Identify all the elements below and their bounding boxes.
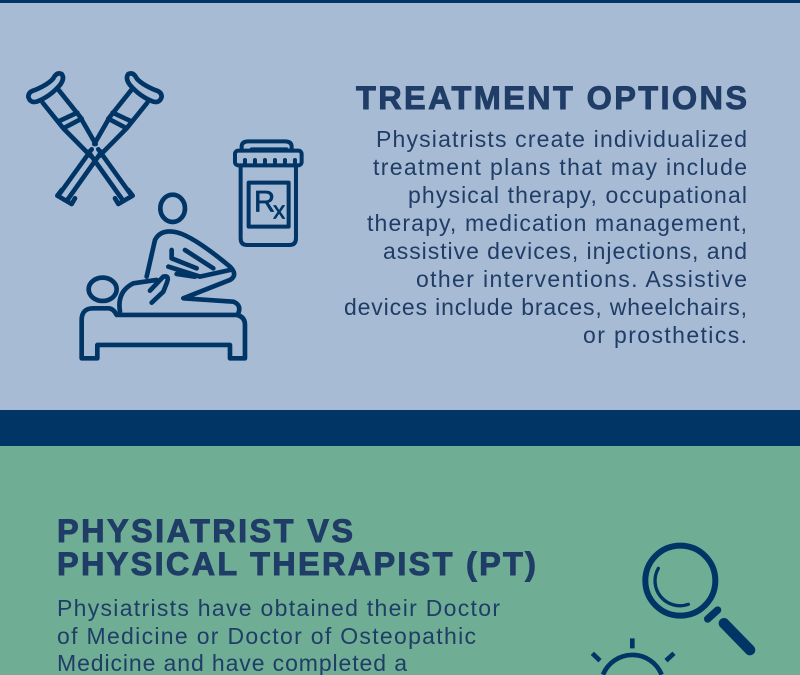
heading: treatment options: TREATMENT OPTIONS: [356, 80, 747, 116]
icon: prescription bottle: [235, 141, 302, 245]
text block: treatment description: physical therapy, occupational: [408, 182, 747, 208]
heading: physiatrist vs physical therapist: PHYSICAL THERAPIST (PT): [57, 546, 536, 582]
text block: physiatrist training: of Medicine or Doctor of Osteopathic: [57, 623, 476, 649]
text block: treatment description: or prosthetics.: [583, 322, 747, 348]
text block: treatment description: therapy, medication management,: [367, 210, 747, 236]
heading: physiatrist vs physical therapist: PHYSIATRIST VS: [57, 513, 353, 549]
heading: physiatrist vs physical therapist: [57, 513, 536, 582]
panel: treatment options background: [0, 3, 800, 410]
text block: treatment description: treatment plans that may include: [373, 154, 747, 180]
Rx label: x: [273, 197, 285, 224]
Rx label: R: [254, 186, 275, 219]
panel: physiatrist vs physical therapist background: [0, 446, 800, 675]
icon: crossed crutches: [28, 73, 162, 204]
text block: treatment description: assistive devices, injections, and: [383, 238, 747, 264]
icon: therapist treating a patient on a bed: [82, 195, 245, 358]
icon: light bulb top: [592, 638, 674, 675]
navy divider band: [0, 410, 800, 446]
text block: treatment description: devices include braces, wheelchairs,: [344, 294, 747, 320]
text block: treatment description: other interventions. Assistive: [416, 266, 747, 292]
top navy edge: [0, 0, 800, 3]
text block: physiatrist training: Physiatrists have obtained their Doctor: [57, 595, 500, 621]
text block: treatment description: Physiatrists create individualized: [376, 126, 747, 152]
text block: physiatrist training: [57, 595, 500, 675]
text block: treatment description: [344, 126, 747, 348]
icon: magnifying glass: [645, 546, 750, 650]
